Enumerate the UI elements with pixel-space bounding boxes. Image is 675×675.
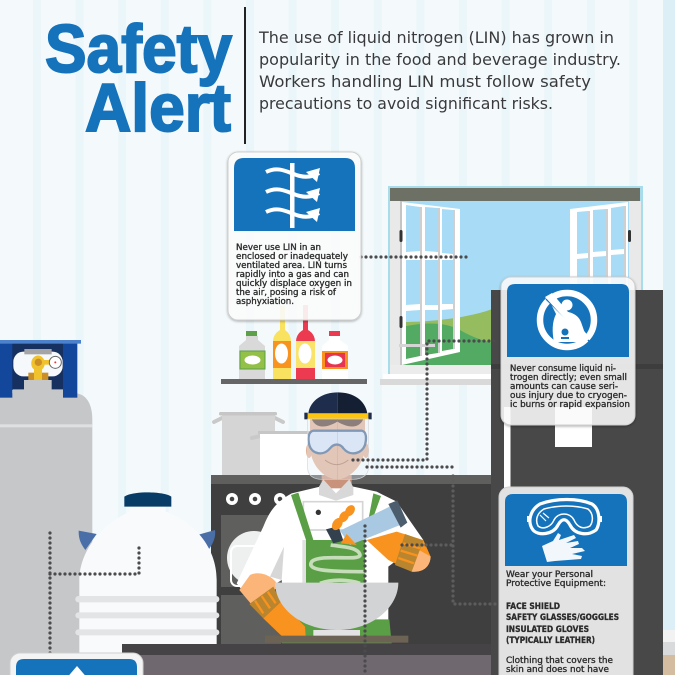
- icon: air flow: [266, 163, 320, 228]
- window: [380, 186, 643, 385]
- card text: Never consume liquid ni-: [510, 364, 616, 374]
- neck and collar: [322, 475, 352, 488]
- apron: [282, 493, 392, 643]
- pots: [214, 412, 322, 476]
- card text: Never use LIN in an: [236, 243, 321, 253]
- card text: Protective Equipment:: [506, 579, 606, 589]
- card text: trogen directly; even small: [510, 373, 627, 383]
- intro text: The use of liquid nitrogen (LIN) has grown in: [258, 28, 614, 47]
- card text: [506, 570, 619, 675]
- jacket: [237, 487, 423, 620]
- card text: rapidly into a gas and can: [236, 270, 349, 280]
- intro text: popularity in the food and beverage industry.: [259, 50, 621, 69]
- icon: no drinking: [540, 293, 594, 347]
- icon: warning triangle: [65, 666, 89, 675]
- hard hat: [308, 392, 338, 413]
- counter front: [122, 644, 491, 655]
- card text: enclosed or inadequately: [236, 252, 348, 262]
- blue icon panel: [505, 494, 627, 566]
- left arm: [239, 573, 278, 607]
- card text: SAFETY GLASSES/GOGGLES: [506, 613, 619, 623]
- dotted connectors: [50, 257, 500, 675]
- icon: goggles and gloves: [527, 500, 602, 562]
- right forearm: [367, 532, 431, 572]
- card text: Clothing that covers the: [506, 656, 613, 666]
- intro text: precautions to avoid significant risks.: [259, 94, 553, 113]
- shelf with bottles: [221, 305, 367, 384]
- blue icon panel: [234, 158, 355, 231]
- card text: INSULATED GLOVES: [506, 625, 589, 635]
- bowl: [275, 583, 398, 630]
- intro text: Workers handling LIN must follow safety: [259, 72, 591, 91]
- title: [45, 11, 232, 146]
- LIN bottle: [326, 526, 343, 543]
- divider line: [244, 7, 246, 144]
- card: warning (cropped at bottom): [10, 653, 143, 675]
- card text: (TYPICALLY LEATHER): [506, 636, 595, 646]
- blue icon panel: [507, 284, 629, 357]
- liquid nitrogen dewar: [75, 492, 219, 675]
- card text: the air, posing a risk of: [236, 288, 337, 298]
- title: Safety: [45, 11, 232, 87]
- goggles: [309, 431, 366, 453]
- counter: [122, 644, 491, 675]
- intro text: [258, 28, 621, 113]
- title: Alert: [85, 70, 231, 146]
- card text: asphyxiation.: [236, 297, 294, 307]
- stove: [211, 475, 491, 645]
- card: do not consume: [501, 277, 635, 425]
- card text: [236, 243, 352, 307]
- head: [310, 419, 365, 479]
- card text: FACE SHIELD: [506, 602, 560, 612]
- dark cabinet: [491, 290, 663, 675]
- card text: Wear your Personal: [506, 570, 593, 580]
- card text: [510, 364, 630, 410]
- card text: ous injury due to cryogen-: [510, 391, 627, 401]
- card text: amounts can cause seri-: [510, 382, 618, 392]
- card text: skin and does not have: [506, 665, 609, 675]
- face shield: [308, 419, 368, 479]
- card: ventilation: [228, 152, 361, 320]
- card text: quickly displace oxygen in: [236, 279, 352, 289]
- steam: [311, 545, 367, 583]
- card text: ic burns or rapid expansion: [510, 400, 630, 410]
- chest pocket: [303, 502, 363, 530]
- card: PPE: [499, 487, 633, 675]
- card text: ventilated area. LIN turns: [236, 261, 348, 271]
- blue icon panel: [16, 659, 137, 675]
- gas cylinder: [0, 340, 92, 675]
- chef: [237, 392, 431, 643]
